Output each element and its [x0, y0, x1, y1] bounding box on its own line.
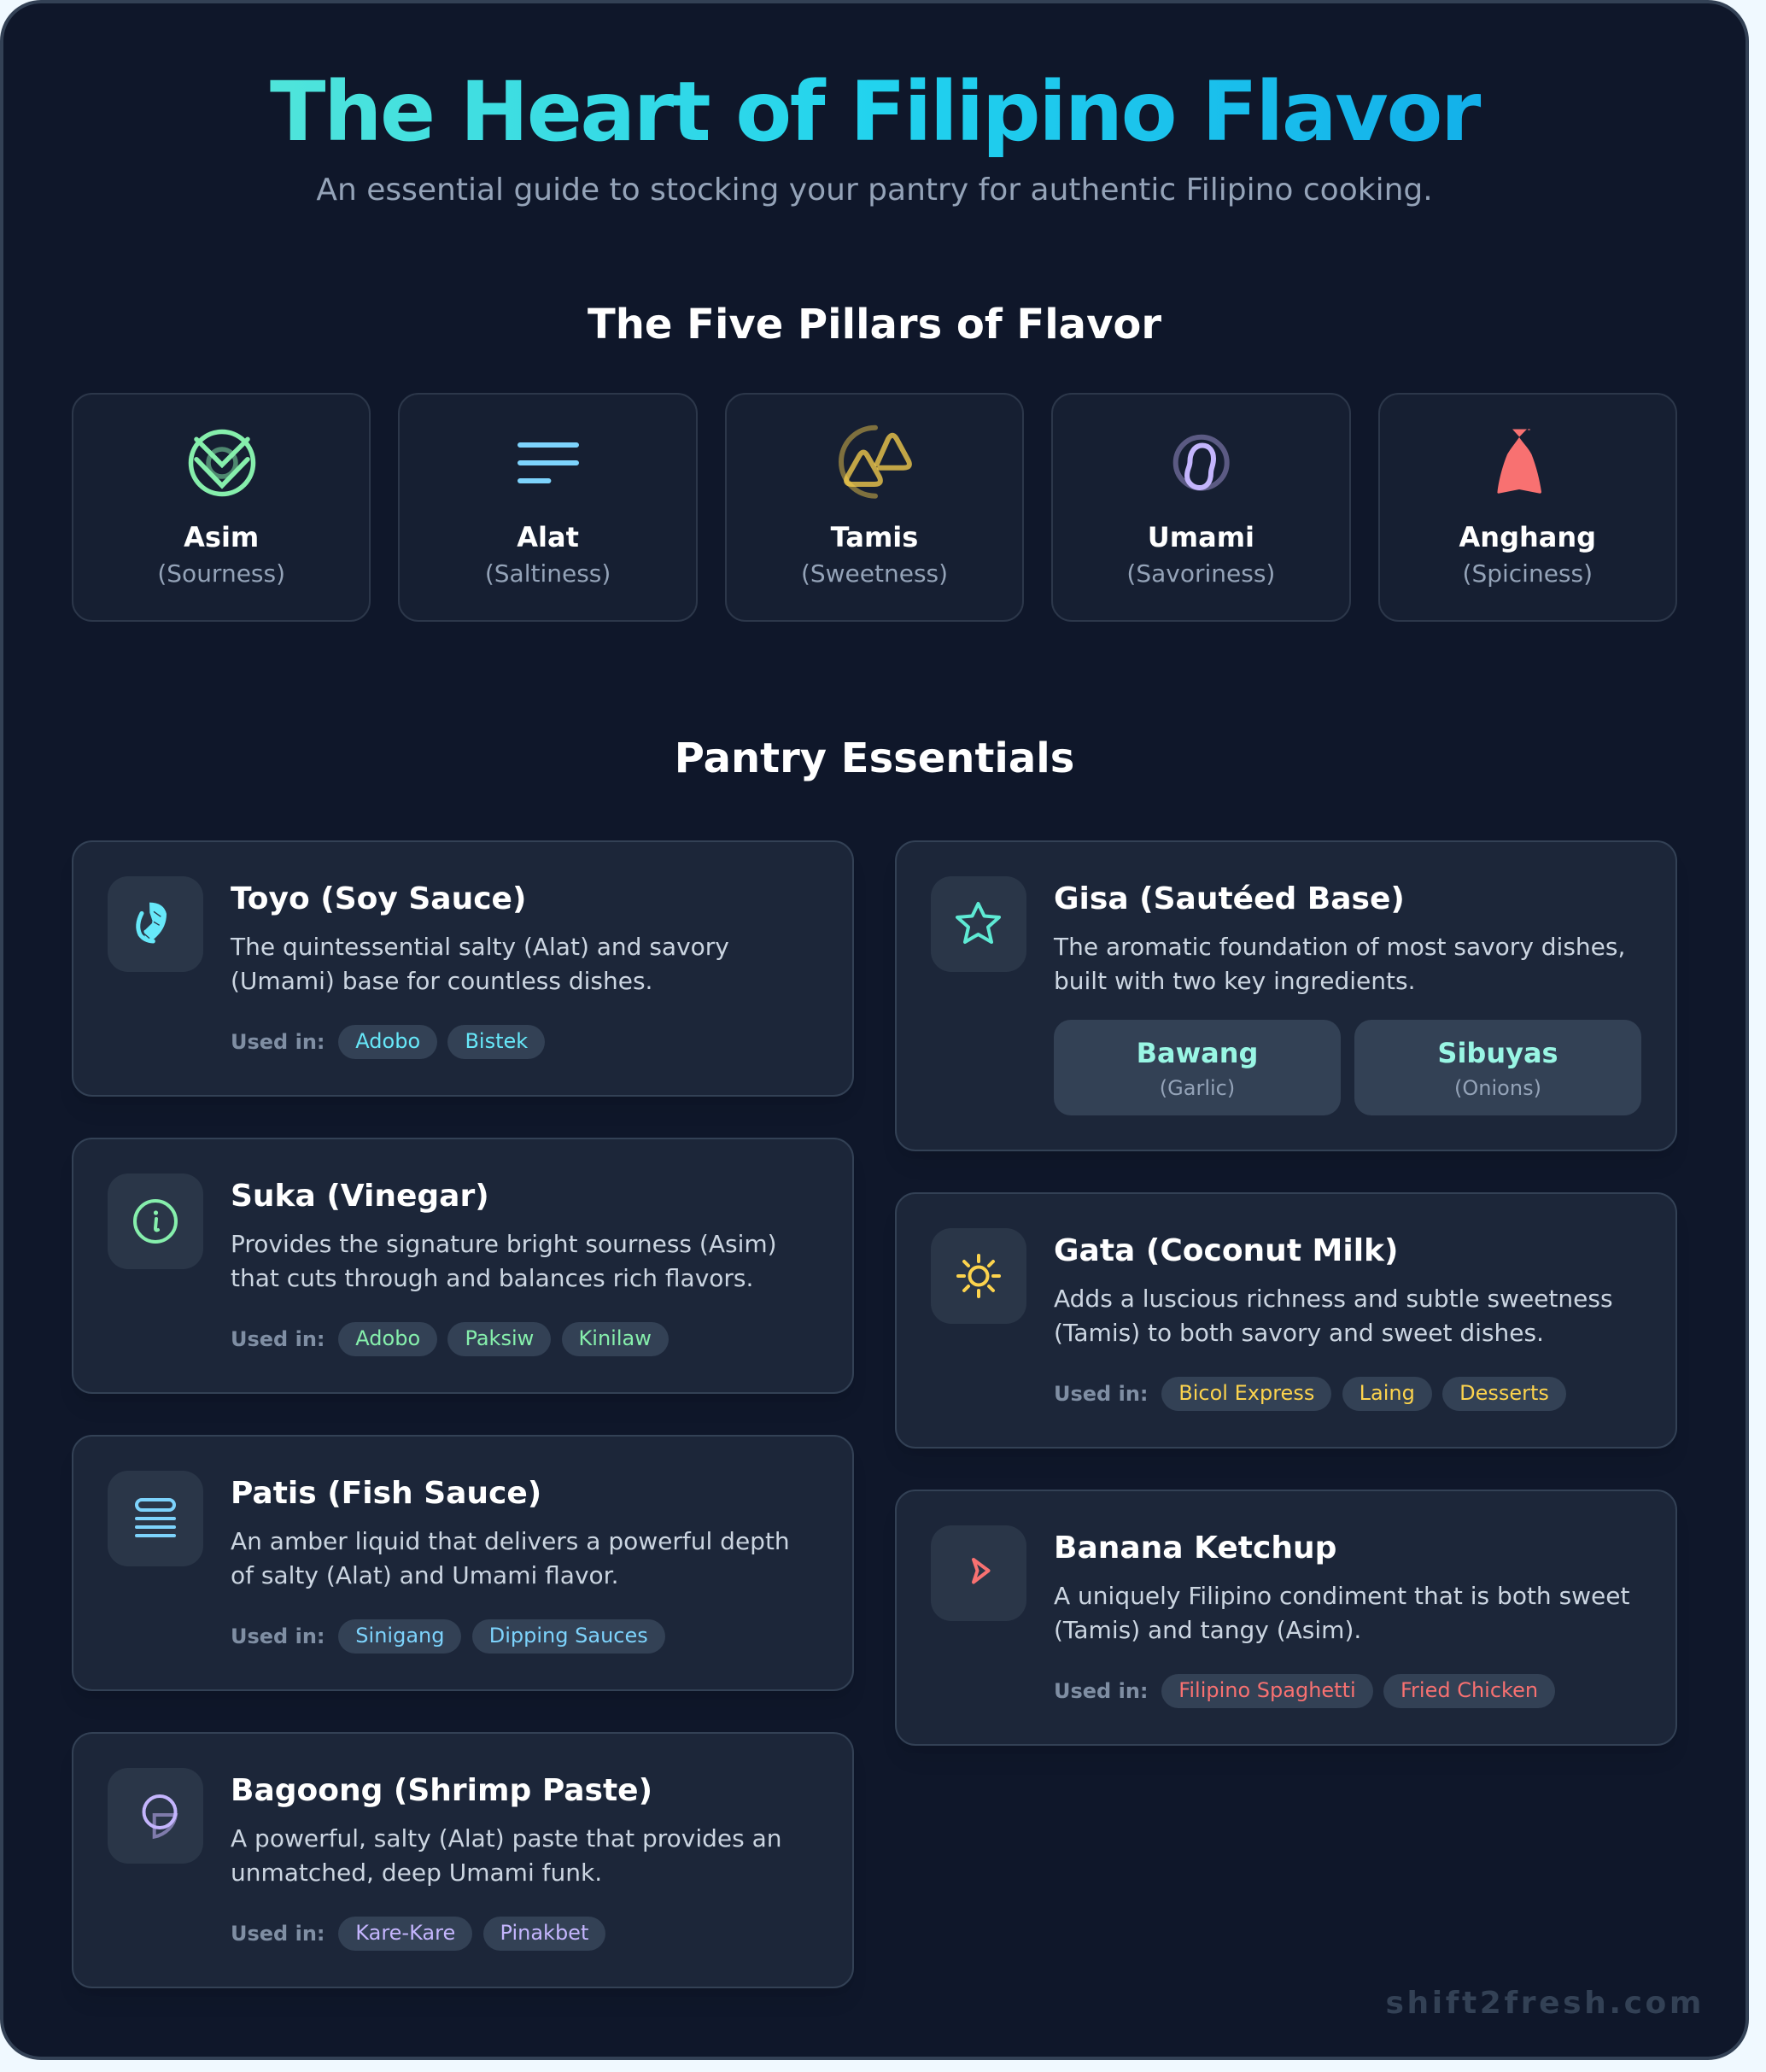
description — [231, 933, 729, 995]
label: Asim: Asim — [184, 521, 259, 553]
ingredient: garlic — [1054, 1020, 1341, 1115]
used in chips: Used in: — [231, 1922, 325, 1946]
panel: Gisa — [895, 840, 1677, 1151]
label: Anghang: Anghang — [1459, 521, 1596, 553]
panel: Tamis pillar — [725, 393, 1024, 622]
used in chips: Adobo — [355, 1326, 420, 1350]
label: Sweetness: (Sweetness) — [801, 559, 948, 588]
description: Adds a luscious richness and subtle sweetness — [1054, 1285, 1613, 1313]
description: of salty (Alat) and Umami flavor. — [231, 1561, 618, 1589]
subtitle: An essential guide to stocking your pantry for authentic Filipino cooking. — [316, 173, 1433, 208]
panel: Asim pillar — [72, 393, 371, 622]
icon: savoriness — [1173, 434, 1230, 491]
panel: Banana Ketchup — [895, 1490, 1677, 1746]
used in chips: Sinigang — [355, 1624, 444, 1648]
icon: sourness — [188, 429, 256, 497]
used in chips: Bicol Express — [1178, 1381, 1314, 1405]
panel: Suka — [72, 1138, 854, 1394]
heading: five pillars: The Five Pillars of Flavor — [588, 301, 1161, 348]
panel: Patis — [72, 1435, 854, 1691]
icon: sun — [931, 1228, 1026, 1324]
description: The quintessential salty (Alat) and savory — [231, 933, 729, 961]
used in chips: Kare-Kare — [355, 1921, 455, 1945]
description: The aromatic foundation of most savory dishes, — [1054, 933, 1625, 961]
description: Provides the signature bright sourness (Asim) — [231, 1230, 777, 1258]
panel: Umami pillar — [1051, 393, 1351, 622]
description: unmatched, deep Umami funk. — [231, 1858, 602, 1887]
icon: soy sauce — [108, 876, 203, 972]
used in chips: Desserts — [1459, 1381, 1549, 1405]
label: Alat: Alat — [517, 521, 579, 553]
ingredient name: Suka (Vinegar) — [231, 1179, 489, 1213]
description — [1054, 1285, 1613, 1347]
ingredient: onions: Sibuyas — [1437, 1037, 1558, 1069]
description — [231, 1527, 790, 1589]
label: Saltiness: (Saltiness) — [485, 559, 611, 588]
watermark: shift2fresh.com — [1386, 1985, 1705, 2021]
icon: banana play — [931, 1525, 1026, 1621]
label: Savoriness: (Savoriness) — [1126, 559, 1275, 588]
used in chips: Used in: — [1054, 1382, 1148, 1406]
ingredient: garlic: Bawang — [1137, 1037, 1258, 1069]
icon: shrimp paste — [108, 1768, 203, 1864]
icon: spiciness — [1497, 429, 1541, 494]
ingredient name: Banana Ketchup — [1054, 1531, 1336, 1565]
icon: saltiness — [518, 442, 579, 483]
icon: fish sauce — [108, 1471, 203, 1566]
ingredient name: Gisa (Sautéed Base) — [1054, 881, 1405, 916]
used in chips: Used in: — [1054, 1679, 1148, 1703]
description — [1054, 1582, 1629, 1644]
ingredient: onions: (Onions) — [1454, 1076, 1541, 1100]
description: (Tamis) and tangy (Asim). — [1054, 1616, 1361, 1644]
description: (Umami) base for countless dishes. — [231, 967, 652, 995]
icon: vinegar info — [108, 1174, 203, 1269]
panel: Bagoong — [72, 1732, 854, 1988]
panel: Toyo — [72, 840, 854, 1097]
label: Tamis: Tamis — [831, 521, 918, 553]
used in chips: Used in: — [231, 1624, 325, 1648]
used in chips: Filipino Spaghetti — [1178, 1678, 1356, 1702]
label: Spiciness: (Spiciness) — [1463, 559, 1593, 588]
ingredient name: Bagoong (Shrimp Paste) — [231, 1773, 652, 1807]
ingredient: garlic: (Garlic) — [1160, 1076, 1235, 1100]
used in chips: Dipping Sauces — [489, 1624, 648, 1648]
ingredient name: Toyo (Soy Sauce) — [231, 881, 526, 916]
used in chips: Fried Chicken — [1401, 1678, 1538, 1702]
used in chips — [231, 1917, 605, 1951]
title: The Heart of Filipino Flavor — [270, 64, 1479, 160]
heading: pantry essentials: Pantry Essentials — [675, 735, 1074, 782]
used in chips: Adobo — [355, 1029, 420, 1053]
used in chips — [231, 1322, 669, 1356]
description — [231, 1230, 777, 1292]
used in chips: Used in: — [231, 1327, 325, 1351]
used in chips: Pinakbet — [500, 1921, 588, 1945]
title — [72, 71, 1677, 167]
used in chips — [1054, 1377, 1566, 1411]
ingredient name: Patis (Fish Sauce) — [231, 1476, 541, 1510]
used in chips — [231, 1619, 665, 1654]
description: (Tamis) to both savory and sweet dishes. — [1054, 1319, 1544, 1347]
ingredient: onions — [1354, 1020, 1641, 1115]
panel: Alat pillar — [398, 393, 698, 622]
icon: star — [931, 876, 1026, 972]
icon: sweetness — [839, 425, 912, 499]
label: Sourness: (Sourness) — [157, 559, 285, 588]
description: A powerful, salty (Alat) paste that provides an — [231, 1824, 782, 1853]
used in chips: Bistek — [465, 1029, 528, 1053]
panel: Gata — [895, 1192, 1677, 1449]
description — [1054, 933, 1625, 995]
panel: Anghang pillar — [1378, 393, 1677, 622]
label: Umami: Umami — [1148, 521, 1254, 553]
used in chips: Used in: — [231, 1030, 325, 1054]
description: An amber liquid that delivers a powerful depth — [231, 1527, 790, 1555]
description: built with two key ingredients. — [1054, 967, 1416, 995]
description — [231, 1824, 782, 1887]
description: A uniquely Filipino condiment that is both sweet — [1054, 1582, 1629, 1610]
description: that cuts through and balances rich flavors. — [231, 1264, 753, 1292]
used in chips: Kinilaw — [579, 1326, 652, 1350]
used in chips — [231, 1025, 545, 1059]
used in chips: Paksiw — [465, 1326, 534, 1350]
used in chips: Laing — [1360, 1381, 1415, 1405]
used in chips — [1054, 1674, 1555, 1708]
ingredient name: Gata (Coconut Milk) — [1054, 1233, 1398, 1267]
